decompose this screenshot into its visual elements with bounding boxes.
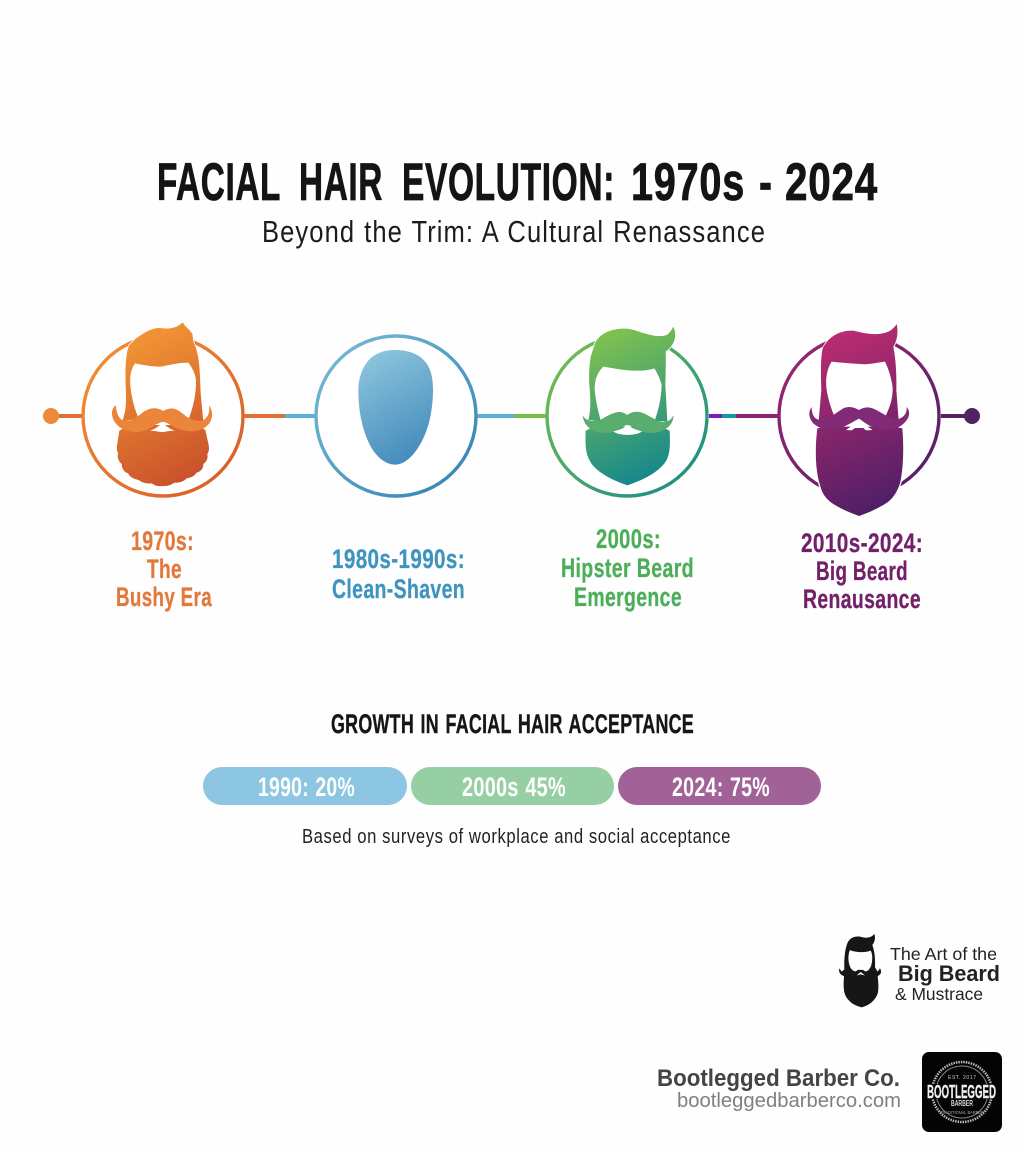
label: 2010s-2024: Renausance xyxy=(803,584,921,614)
label: 2000s: 2000s: xyxy=(596,524,661,554)
label: 1970s xyxy=(116,526,212,612)
label: 2010s-2024: 2010s-2024: xyxy=(801,528,923,558)
label: 2010s-2024: Big Beard xyxy=(816,556,908,586)
note: survey source: Based on surveys of workplace and social acceptance xyxy=(302,826,731,848)
title: EVOLUTION: xyxy=(402,153,615,212)
label: 2000s xyxy=(561,524,694,612)
timeline start dot xyxy=(43,408,59,424)
subtitle: Beyond the Trim: A Cultural Renassance xyxy=(262,214,766,249)
heading: growth in acceptance: GROWTH IN FACIAL HAIR ACCEPTANCE xyxy=(331,709,694,739)
label: 1980s-1990s: Clean-Shaven xyxy=(332,574,465,604)
bar: 1990 20%: 1990: 20% xyxy=(258,772,355,802)
bar: 2024 75%: 2024: 75% xyxy=(672,772,770,802)
timeline end dot xyxy=(964,408,980,424)
era 2000s icon: hipster beard xyxy=(547,327,707,496)
title: HAIR xyxy=(299,153,383,212)
brand name: Bootlegged Barber Co. xyxy=(657,1065,900,1092)
label: 1980s-1990s: 1980s-1990s: xyxy=(332,544,465,574)
secondary logo: Art of the Big Beard xyxy=(839,934,1000,1007)
brand badge: EST. 2017 xyxy=(948,1075,976,1081)
label: 1980s-1990s xyxy=(332,544,465,604)
era 2010s-2024 icon: big beard xyxy=(779,324,939,516)
secondary logo: Art of the Big Beard: Big Beard xyxy=(898,961,1000,986)
bar: 2000s 45% xyxy=(411,767,614,805)
timeline connector lines xyxy=(51,414,972,418)
brand badge xyxy=(922,1052,1002,1132)
bar: 2000s 45%: 2000s 45% xyxy=(462,772,566,802)
bar: 1990 20% xyxy=(203,767,407,805)
label: 2000s: Hipster Beard xyxy=(561,553,694,583)
label: 1970s: Bushy Era xyxy=(116,582,212,612)
secondary logo: Art of the Big Beard: The Art of the xyxy=(890,944,997,964)
label: 2010s-2024 xyxy=(801,528,923,614)
era 1980s-1990s icon: clean shaven xyxy=(316,336,476,496)
icon: black bearded head xyxy=(839,934,881,1007)
brand url: bootleggedbarberco.com xyxy=(677,1089,901,1112)
brand badge: BARBER xyxy=(951,1099,973,1108)
timeline xyxy=(43,322,980,516)
title: 1970s xyxy=(631,153,745,212)
label: 1970s: The xyxy=(147,554,182,584)
label: 1970s: 1970s: xyxy=(131,526,194,556)
brand badge: TRADITIONAL BARBER xyxy=(940,1110,985,1115)
title: 2024 xyxy=(785,153,878,212)
secondary logo: Art of the Big Beard: & Mustrace xyxy=(895,984,983,1004)
era 1970s icon: bushy beard xyxy=(83,322,243,496)
bar: 2024 75% xyxy=(618,767,821,805)
title: - xyxy=(759,153,772,212)
title: FACIAL xyxy=(157,153,281,212)
title xyxy=(157,153,878,212)
label: 2000s: Emergence xyxy=(574,582,682,612)
